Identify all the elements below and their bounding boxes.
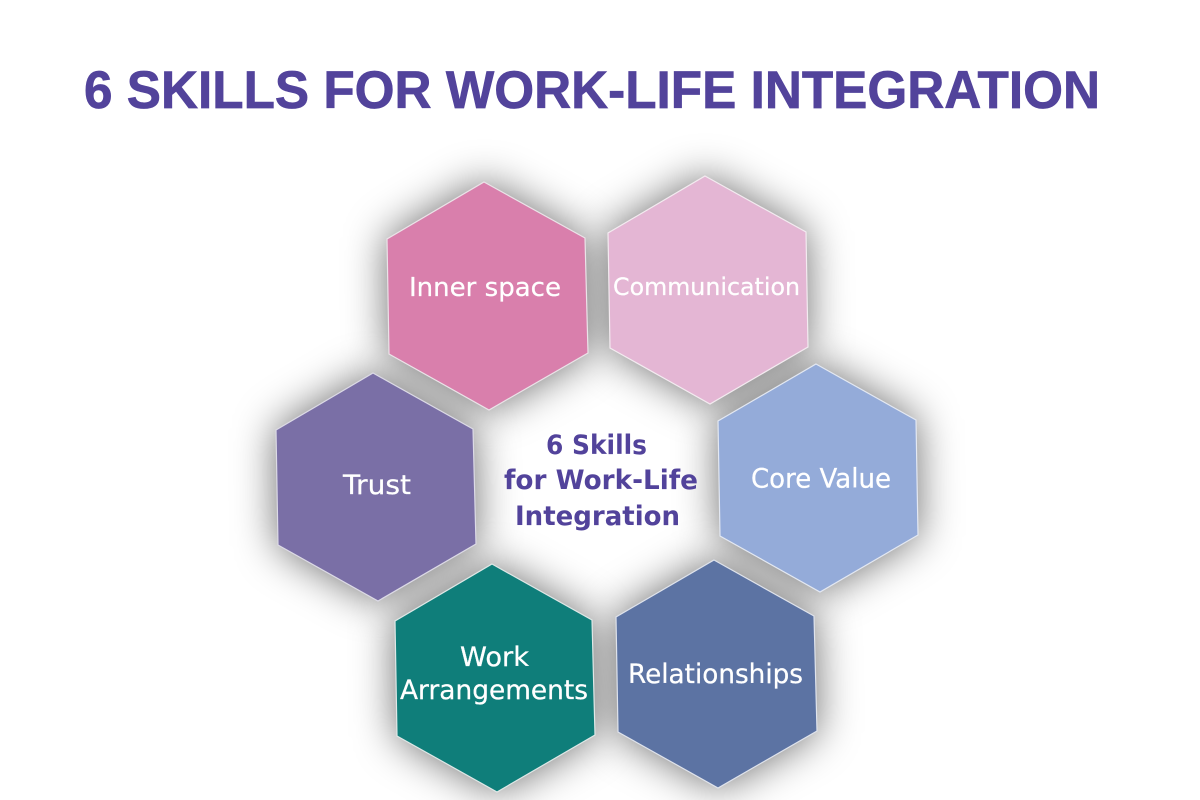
hexagon: Communication: Communication	[613, 273, 800, 301]
hexagon: Core Value: Core Value	[751, 464, 891, 494]
hexagon: Core Value	[718, 364, 918, 592]
hexagon: Inner space	[387, 182, 588, 410]
center label: for Work-Life	[504, 465, 698, 496]
hexagon: Work Arrangements: Arrangements	[400, 675, 588, 706]
hexagon shadows	[276, 176, 918, 792]
center label: Integration	[515, 501, 680, 532]
hexagon: Work Arrangements	[395, 564, 595, 792]
hexagon: Inner space: Inner space	[409, 273, 561, 303]
title: 6 SKILLS FOR WORK-LIFE INTEGRATION	[84, 61, 1100, 120]
hexagon: Communication	[608, 176, 808, 404]
center label	[504, 430, 698, 532]
center label: 6 Skills	[546, 430, 647, 461]
hexagon: Relationships: Relationships	[628, 659, 803, 690]
hexagon: Trust	[276, 373, 476, 601]
hexagon: Trust: Trust	[342, 470, 411, 501]
hexagon: Work Arrangements: Work	[460, 642, 530, 673]
hexagon: Relationships	[616, 560, 817, 788]
